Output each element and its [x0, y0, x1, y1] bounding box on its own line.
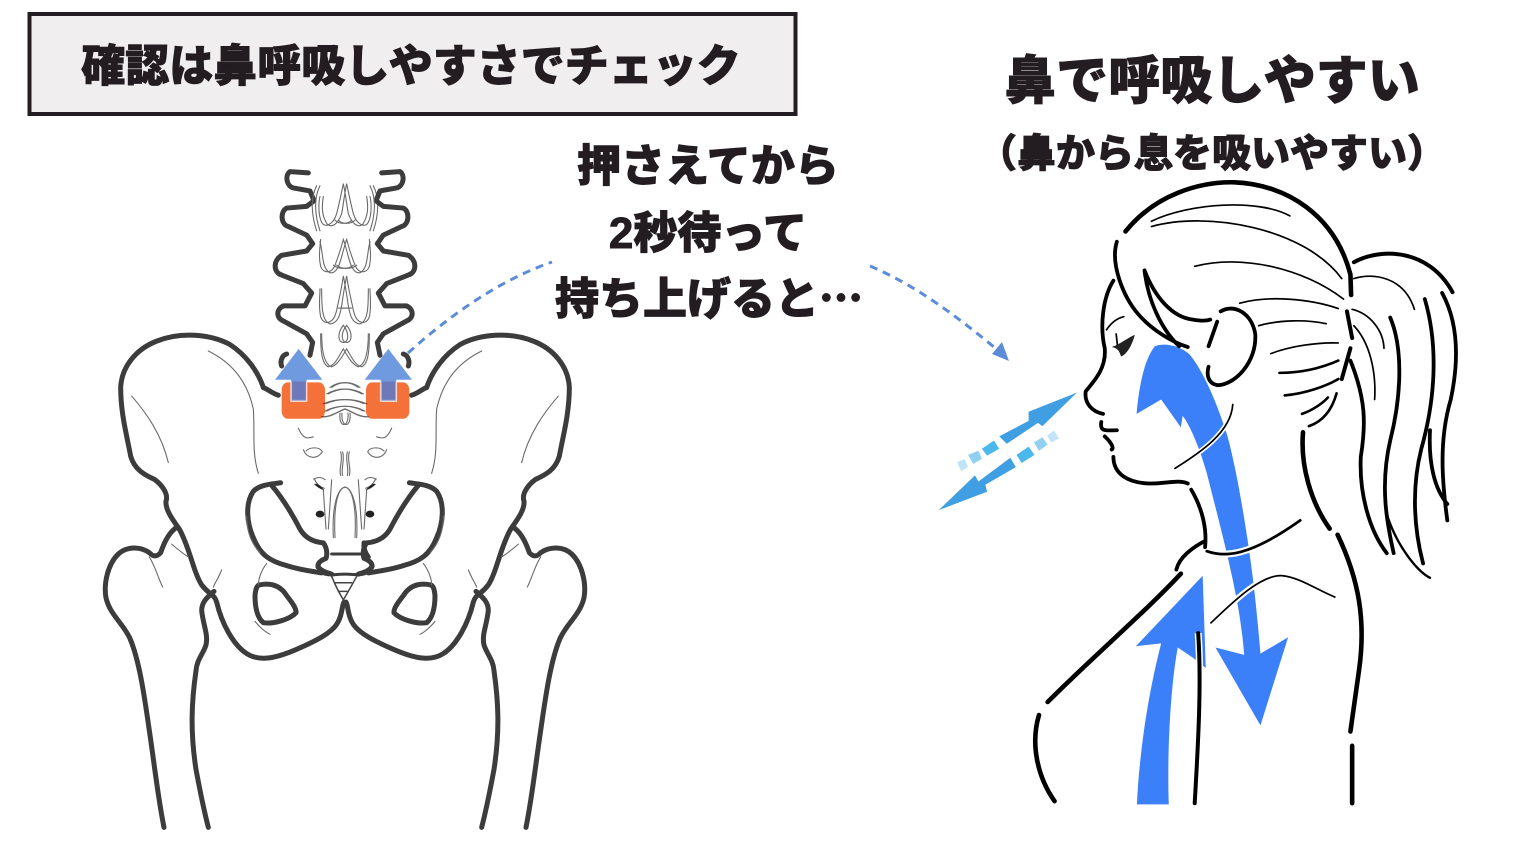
hair	[1115, 182, 1351, 426]
sacroiliac ring	[248, 483, 322, 573]
up arrow: right	[365, 349, 412, 401]
ilium outline	[121, 335, 344, 658]
ear	[1208, 309, 1255, 385]
subheading: （鼻から息を吸いやすい）	[978, 133, 1446, 176]
airflow arrow: up through the chest	[1136, 576, 1206, 804]
neck and collar	[1176, 490, 1300, 570]
pressure point: right	[366, 382, 409, 419]
spine detail	[316, 184, 378, 367]
jaw line	[1175, 404, 1233, 468]
pelvis and spine illustration	[105, 172, 585, 827]
ponytail	[1342, 254, 1456, 578]
instruction text	[555, 142, 863, 327]
coccyx	[322, 554, 368, 575]
femur	[105, 527, 177, 827]
sacrum detail	[298, 383, 368, 538]
woman profile illustration	[939, 182, 1456, 804]
airflow arrow: down through the neck	[1137, 345, 1288, 725]
instruction text: 押さえてから	[577, 142, 839, 191]
lumbar vertebrae processes	[275, 172, 314, 355]
obturator foramen	[255, 584, 296, 623]
face profile	[1085, 281, 1188, 484]
instruction text: 2秒待って	[609, 209, 807, 258]
up arrow: left	[275, 349, 322, 401]
dashed arrow: left connector	[408, 262, 552, 353]
heading: easy nasal breathing: 鼻で呼吸しやすい	[1004, 53, 1420, 111]
dashed arrow: right connector	[870, 266, 1009, 361]
title text: 確認は鼻呼吸しやすさでチェック	[81, 42, 741, 91]
breath arrow: exhale	[939, 431, 1059, 510]
title box	[30, 14, 796, 114]
breath arrow: inhale	[957, 393, 1077, 471]
pressure point: left	[282, 382, 325, 419]
torso lines	[1035, 432, 1362, 803]
instruction text: 持ち上げると…	[555, 263, 863, 327]
